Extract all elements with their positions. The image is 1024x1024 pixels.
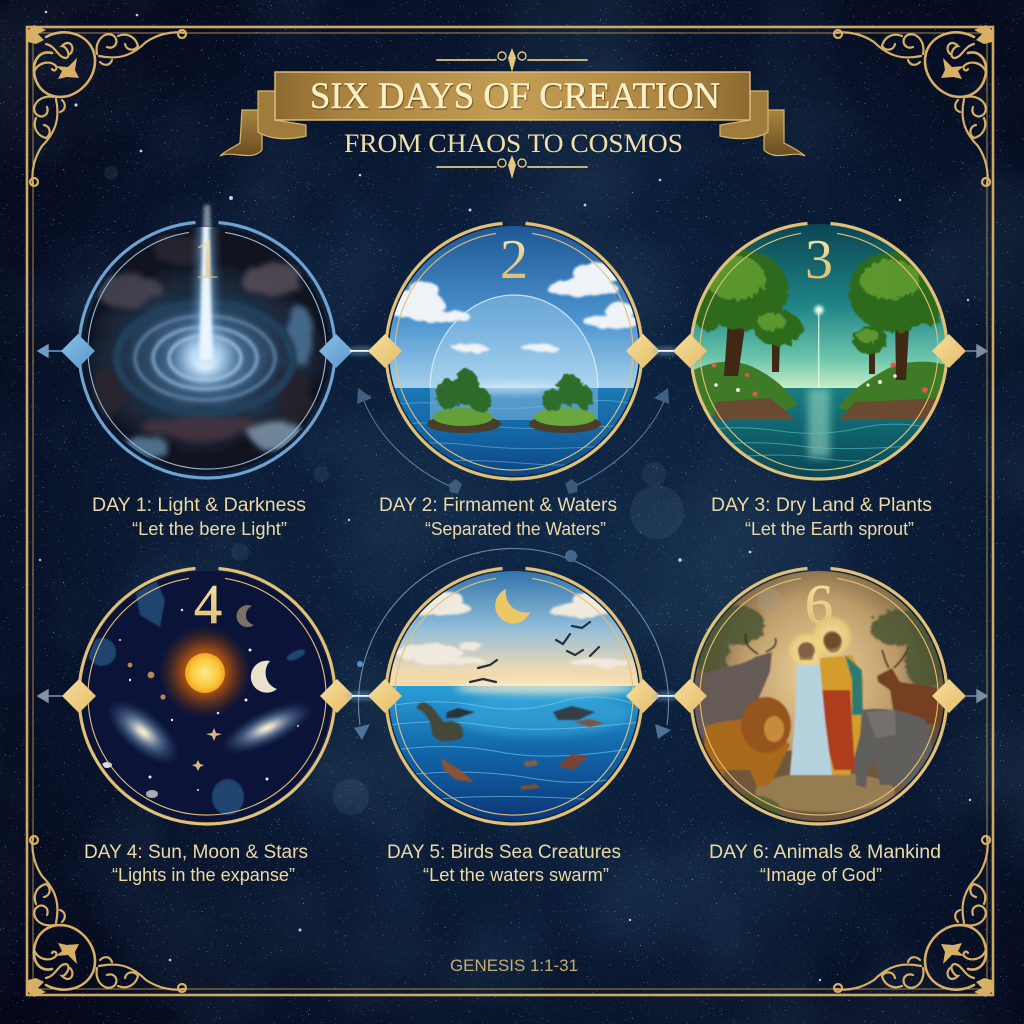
banner main panel (275, 72, 750, 120)
diamond left (62, 679, 96, 713)
caption day 2 (379, 495, 617, 539)
diamond left (673, 334, 707, 368)
diamond left (673, 679, 707, 713)
corner flourish: top left (26, 25, 186, 186)
ring (691, 224, 947, 479)
caption day 1 (92, 495, 306, 539)
panel: day 3 (673, 222, 987, 539)
diamond right (320, 679, 354, 713)
birds (470, 622, 599, 682)
caption day 5: DAY 5: Birds Sea Creatures (387, 842, 621, 863)
tree crowns (692, 250, 946, 354)
ring (386, 224, 642, 479)
diamond left (61, 334, 95, 368)
caption day 1: “Let the bere Light” (132, 518, 287, 539)
ornament below subtitle (437, 155, 587, 179)
ring (79, 568, 335, 824)
diamond right (626, 334, 660, 368)
scene: sun, moon and stars (81, 570, 333, 822)
woman (790, 665, 832, 775)
day number 3: 3 (805, 229, 833, 291)
caption day 2: “Separated the Waters” (425, 518, 606, 539)
stag left (692, 652, 772, 738)
caption day 3: “Let the Earth sprout” (745, 518, 914, 539)
panel: day 1 (38, 205, 353, 539)
left island (690, 362, 797, 420)
right island (838, 362, 950, 420)
diamond right (319, 334, 353, 368)
ribbon right fold (720, 91, 805, 156)
beam rising above ring (203, 205, 211, 228)
panel: day 4 (38, 568, 354, 885)
caption day 4: DAY 4: Sun, Moon & Stars (84, 842, 308, 863)
ribbon left fold (220, 91, 306, 156)
link day 2 to day 3 (652, 346, 680, 356)
scene: birds, sea creatures and moon (386, 566, 642, 822)
day number 1: 1 (193, 229, 221, 291)
diamond left (368, 679, 402, 713)
lion (703, 715, 790, 790)
caption day 1: DAY 1: Light & Darkness (92, 495, 306, 516)
caption day 4: “Lights in the expanse” (112, 864, 295, 885)
panel: day 2 (368, 222, 660, 539)
caption day 6 (709, 842, 941, 885)
caption day 6: DAY 6: Animals & Mankind (709, 842, 941, 863)
ring (691, 568, 947, 824)
arrow right (966, 345, 987, 357)
ring (386, 568, 642, 824)
diamond right (626, 679, 660, 713)
halos (790, 634, 821, 664)
scene: swirling darkness and beam of light (83, 210, 331, 474)
caption day 2: DAY 2: Firmament & Waters (379, 495, 617, 516)
caption day 5 (387, 842, 621, 885)
corner flourish: bottom left (26, 836, 186, 997)
ring (79, 222, 335, 478)
diamond right (932, 334, 966, 368)
arrow left (38, 690, 62, 702)
caption day 5: “Let the waters swarm” (423, 864, 609, 885)
sea creatures (416, 703, 604, 790)
arrow right (966, 690, 987, 702)
left island (427, 369, 501, 433)
scene: animals and mankind (692, 570, 948, 830)
caption day 3: DAY 3: Dry Land & Plants (711, 495, 932, 516)
footer scripture reference: GENESIS 1:1-31 (450, 957, 578, 975)
diamond left (368, 334, 402, 368)
day number 4: 4 (194, 574, 222, 636)
corner flourish: top right (834, 25, 994, 186)
arc around day 5 (354, 548, 671, 740)
man (820, 655, 864, 775)
link day 1 to day 2 (345, 346, 377, 356)
diamond right (932, 679, 966, 713)
panel: day 6 (673, 568, 987, 885)
subtitle: FROM CHAOS TO COSMOS (344, 129, 683, 158)
panel: day 5 (368, 566, 660, 885)
elephant (854, 709, 933, 788)
deer right (877, 668, 942, 725)
corner flourish: bottom right (834, 836, 994, 997)
caption day 4 (84, 842, 308, 885)
connector arcs between days (354, 388, 671, 740)
caption day 3 (711, 495, 932, 539)
scene: firmament dome over waters (390, 226, 638, 476)
title text: SIX DAYS OF CREATION (310, 76, 720, 117)
link day 5 to day 6 (652, 691, 680, 701)
caption day 6: “Image of God” (760, 864, 882, 885)
day number 2: 2 (500, 229, 528, 291)
ornament above banner (437, 48, 587, 72)
arrow left (38, 345, 62, 357)
arc around day 2 (357, 388, 669, 494)
scene: dry land, trees and water (690, 222, 950, 488)
right island (529, 374, 601, 433)
title banner (220, 48, 805, 179)
link day 4 to day 5 (345, 691, 377, 701)
day number 6: 6 (805, 574, 833, 636)
